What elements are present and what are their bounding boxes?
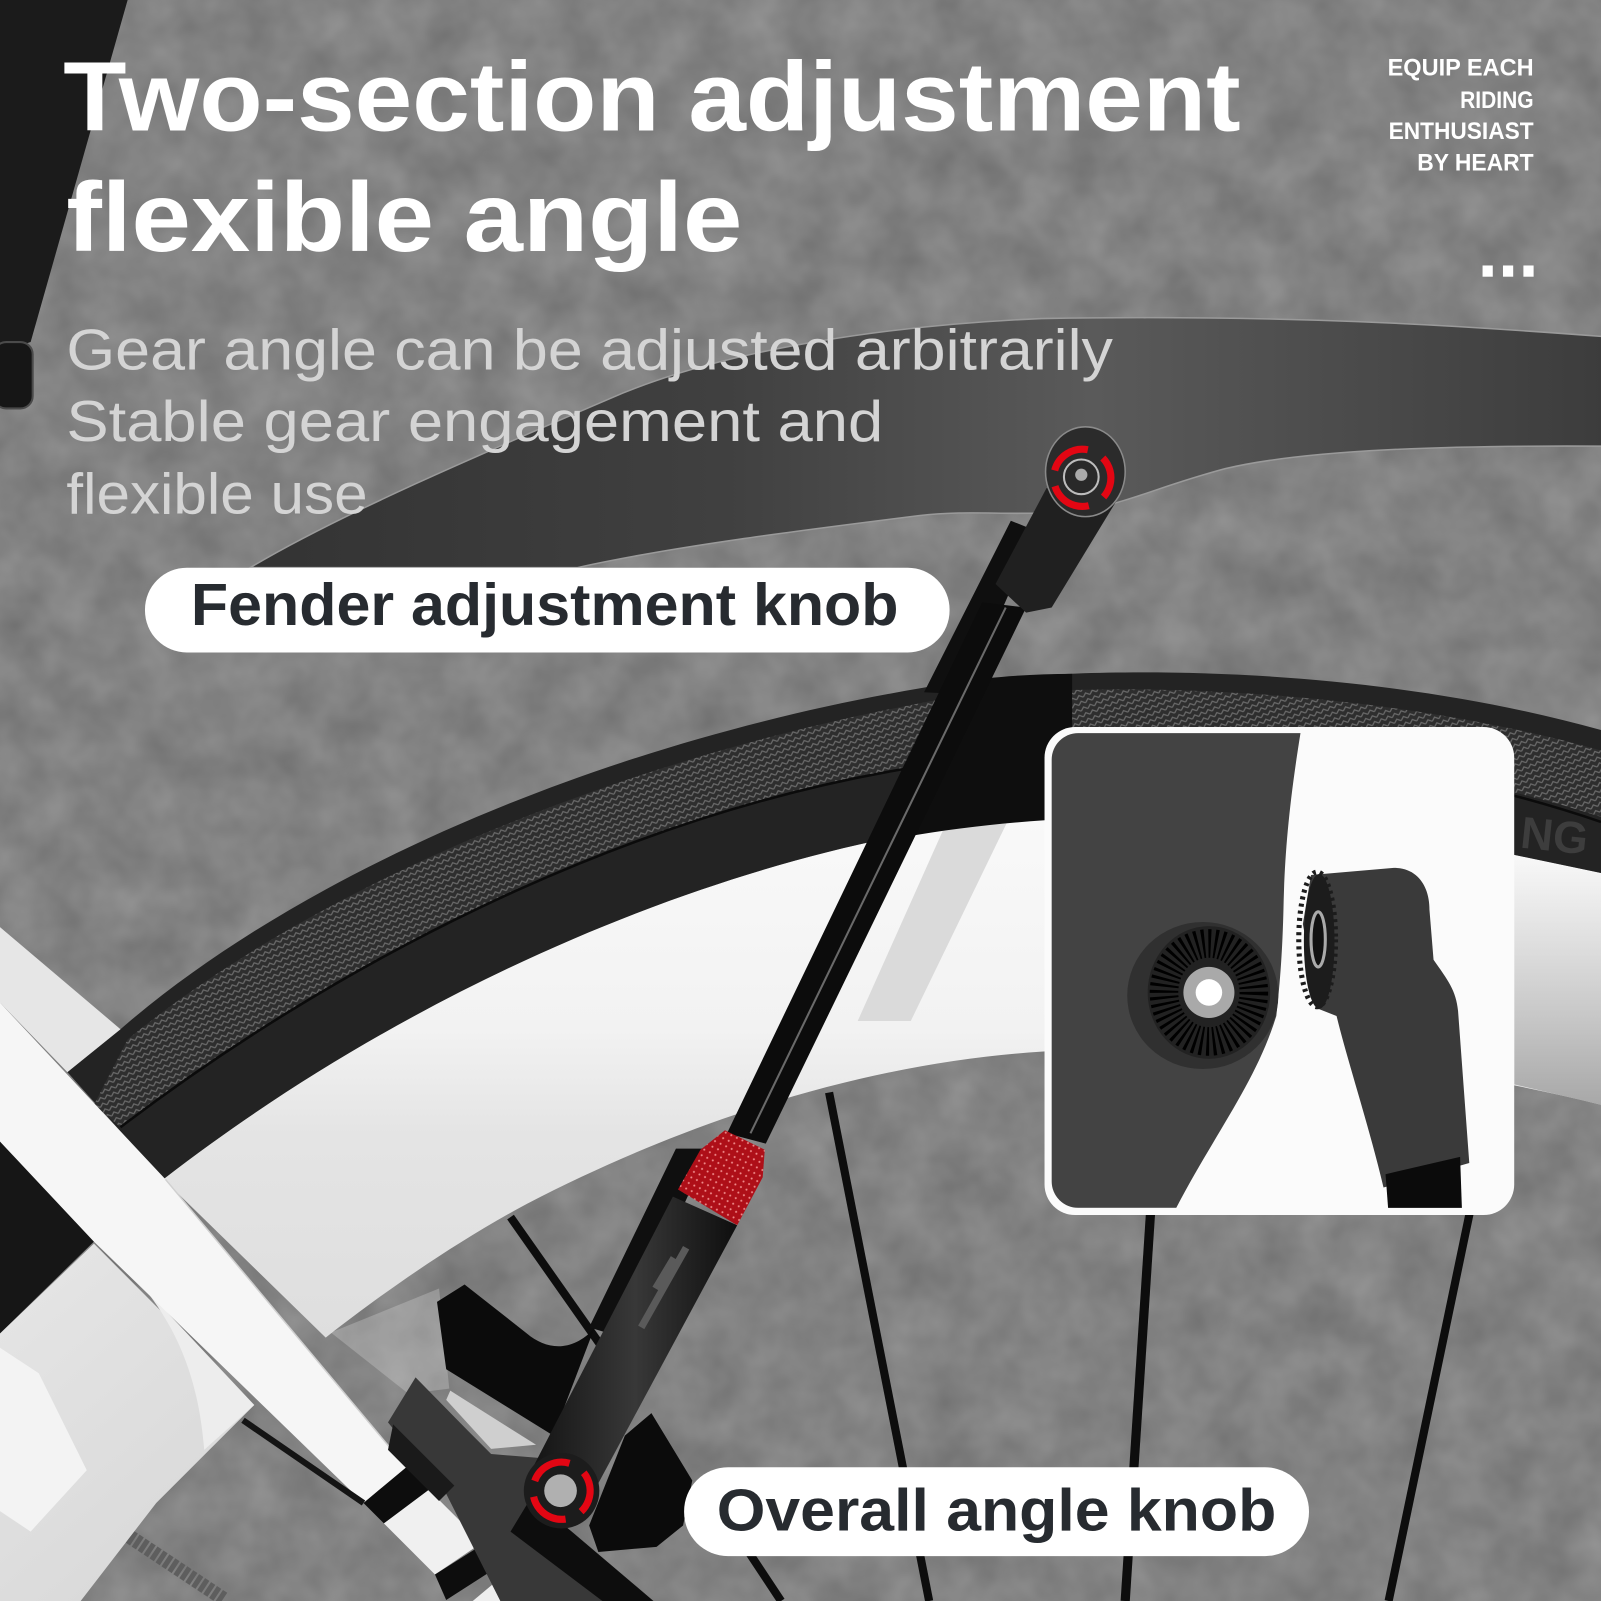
knob: red telescopic nut [678, 1130, 765, 1225]
stay: rear rod behind strut [589, 521, 1036, 1338]
title [63, 42, 1241, 272]
valve stem [130, 1537, 224, 1599]
rim shadow band [858, 821, 1008, 1021]
fender: upper section [250, 318, 1601, 568]
brand tagline: EQUIP EACH [1388, 55, 1534, 82]
white wheel rim [163, 813, 1601, 1338]
tire [67, 672, 1601, 1179]
title: flexible angle [66, 162, 742, 272]
brake caliper [388, 1284, 692, 1601]
three square dots [1483, 265, 1534, 277]
stay: black tube [727, 602, 1026, 1144]
title: Two-section adjustment [63, 42, 1241, 152]
label pill: overall angle knob [684, 1467, 1309, 1556]
inset: fender gear seat [1050, 731, 1301, 1208]
stay: upper connector [996, 488, 1118, 613]
brand tagline: RIDING [1460, 87, 1534, 114]
knob: overall angle with red ring [524, 1453, 599, 1529]
frame: upper thin tube [0, 927, 120, 1072]
inset: strut head [1299, 868, 1469, 1215]
stay: lower grip [533, 1197, 737, 1493]
lit ground behind caliper [331, 1289, 449, 1394]
label pill: overall angle knob: Overall angle knob [717, 1477, 1276, 1544]
brand tagline [1388, 55, 1534, 177]
label pill: fender adjustment knob: Fender adjustment knob [191, 571, 899, 638]
brand tagline: BY HEART [1417, 150, 1534, 177]
subtitle text block [66, 319, 1113, 527]
inset photo: gear teeth close-up [1045, 727, 1514, 1215]
spokes [511, 1093, 1470, 1601]
knob: fender adjustment with red ring [1046, 427, 1125, 517]
subtitle text block: Gear angle can be adjusted arbitrarily [66, 319, 1113, 383]
frame: left stay [0, 1244, 254, 1601]
brand tagline: ENTHUSIAST [1389, 118, 1534, 145]
subtitle text block: flexible use [66, 463, 368, 527]
label pill: fender adjustment knob [145, 568, 950, 652]
frame: main white tube [0, 1003, 536, 1601]
subtitle text block: Stable gear engagement and [66, 390, 883, 454]
tire: NG [1518, 807, 1591, 864]
tire: dark section behind frame [0, 1142, 94, 1333]
seat post [0, 0, 128, 408]
